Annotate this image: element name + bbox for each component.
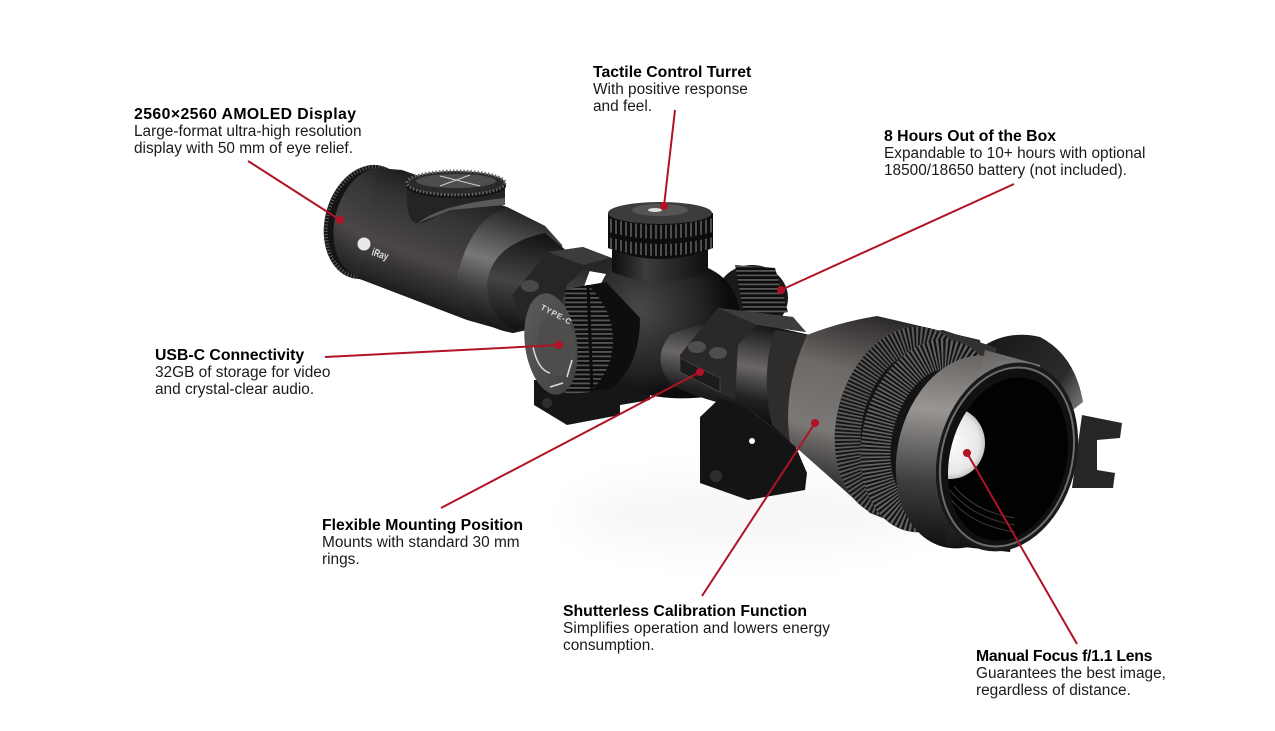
front tube — [660, 322, 810, 445]
leader line: battery — [777, 184, 1014, 294]
leader line: mounting position — [441, 368, 704, 508]
callout: battery life: 18500/18650 battery (not included). — [884, 162, 1127, 179]
callout: AMOLED display: 2560×2560 AMOLED Display — [134, 106, 356, 123]
objective lens — [936, 362, 1078, 552]
callout: lens: Manual Focus f/1.1 Lens — [976, 648, 1152, 665]
rear tube — [311, 155, 590, 333]
leader line: USB-C — [325, 341, 563, 357]
callout: control turret: and feel. — [593, 98, 652, 115]
flip-up lens cap — [985, 335, 1122, 488]
callout: lens — [976, 648, 1166, 699]
eyepiece dial — [406, 171, 506, 223]
tapered cone — [767, 330, 808, 448]
front ring mount — [680, 308, 807, 500]
callout: AMOLED display: display with 50 mm of eye relief. — [134, 140, 353, 157]
leader line: control turret — [660, 110, 675, 210]
callout: USB-C: 32GB of storage for video — [155, 364, 330, 381]
ground shadow — [570, 477, 930, 553]
callout: USB-C: USB-C Connectivity — [155, 347, 304, 364]
objective bell — [788, 316, 1010, 550]
callout: USB-C — [155, 347, 330, 398]
callout: shutterless calibration: Shutterless Calibration Function — [563, 603, 807, 620]
illustration: thermal rifle scope with leader lines — [248, 110, 1122, 644]
callout: lens: Guarantees the best image, — [976, 665, 1166, 682]
objective front section — [875, 339, 1061, 565]
leader line: lens — [963, 449, 1077, 644]
logo: iRay — [370, 246, 391, 263]
callout: control turret — [593, 64, 752, 115]
top turret — [608, 202, 713, 282]
callout: mounting position: rings. — [322, 551, 360, 568]
callout: mounting position: Flexible Mounting Position — [322, 517, 523, 534]
callout: mounting position: Mounts with standard 30 mm — [322, 534, 520, 551]
callout: AMOLED display — [134, 106, 362, 157]
callout: shutterless calibration: Simplifies operation and lowers energy — [563, 620, 830, 637]
central body — [591, 268, 741, 398]
callout: USB-C: and crystal-clear audio. — [155, 381, 314, 398]
left dial with USB-C cover — [518, 282, 640, 398]
callout: control turret: With positive response — [593, 81, 748, 98]
leader line: shutterless calibration — [702, 419, 819, 596]
right dial — [716, 265, 788, 331]
focus ring knurled bands — [814, 311, 1022, 548]
logo — [358, 238, 391, 263]
callout: control turret: Tactile Control Turret — [593, 64, 751, 81]
callout: battery life: 8 Hours Out of the Box — [884, 128, 1056, 145]
callout: mounting position — [322, 517, 523, 568]
callout: battery life — [884, 128, 1145, 179]
leader line: AMOLED display — [248, 161, 344, 224]
callout: shutterless calibration — [563, 603, 830, 654]
callout: battery life: Expandable to 10+ hours with optional — [884, 145, 1145, 162]
callout: shutterless calibration: consumption. — [563, 637, 655, 654]
callout: AMOLED display: Large-format ultra-high resolution — [134, 123, 362, 140]
callout: lens: regardless of distance. — [976, 682, 1131, 699]
left dial with USB-C cover: TYPE-C — [539, 303, 573, 327]
rear ring mount — [512, 247, 650, 425]
